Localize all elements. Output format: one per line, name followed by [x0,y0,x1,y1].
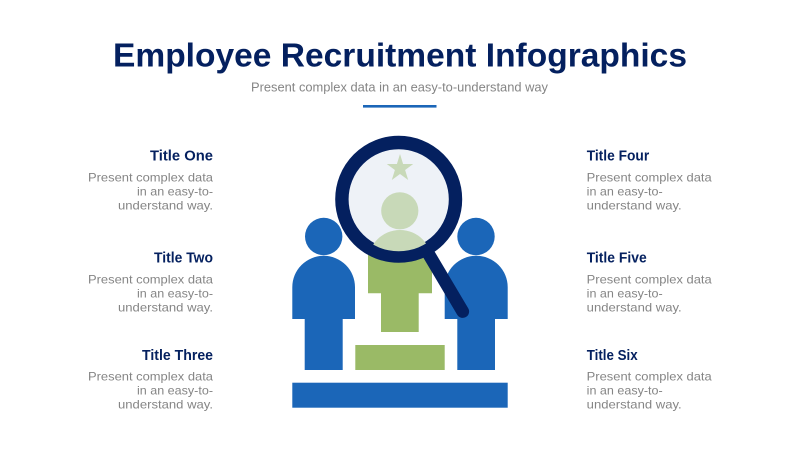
left text block: title three: in an easy-to- [137,384,213,398]
left text block: title three: Title Three [142,348,213,364]
left text block: title two [88,251,213,315]
icon: left candidate [292,218,355,370]
right text block: title six: Present complex data [587,370,712,384]
right text block: title four: Present complex data [587,171,712,185]
icon: star [387,154,413,180]
subtitle: Present complex data in an easy-to-understand way [251,81,549,95]
icon: green podium [355,345,445,370]
right text block: title six: understand way. [587,398,682,412]
left text block: title one [88,149,213,213]
left text block: title one: Title One [150,149,213,165]
right text block: title four: Title Four [587,149,650,165]
left text block: title two: in an easy-to- [137,287,213,301]
right text block: title five: understand way. [587,301,682,315]
left text block: title one: understand way. [118,199,213,213]
title: Employee Recruitment Infographics [113,37,687,74]
icon: right candidate [445,218,508,370]
right text block: title five: in an easy-to- [587,287,663,301]
icon: magnifying glass lens [342,142,456,256]
right text block: title four: in an easy-to- [587,185,663,199]
right text block: title five [587,251,712,315]
icon: selected candidate [368,255,432,332]
icon: person inside lens [373,192,426,252]
left text block: title two: Title Two [154,251,213,267]
left text block: title one: in an easy-to- [137,185,213,199]
icon: magnifying glass handle [428,253,463,312]
icon: base platform [292,383,508,408]
icon: recruitment illustration [292,142,508,408]
right text block: title four: understand way. [587,199,682,213]
right text block: title four [587,149,712,213]
left text block: title three: Present complex data [88,370,213,384]
right text block: title six: in an easy-to- [587,384,663,398]
right text block: title five: Present complex data [587,273,712,287]
title underline [363,105,436,108]
left text block: title one: Present complex data [88,171,213,185]
left text block: title two: Present complex data [88,273,213,287]
left text block: title three [88,348,213,412]
left text block: title two: understand way. [118,301,213,315]
left text block: title three: understand way. [118,398,213,412]
right text block: title five: Title Five [587,251,647,267]
right text block: title six: Title Six [587,348,638,364]
right text block: title six [587,348,712,412]
